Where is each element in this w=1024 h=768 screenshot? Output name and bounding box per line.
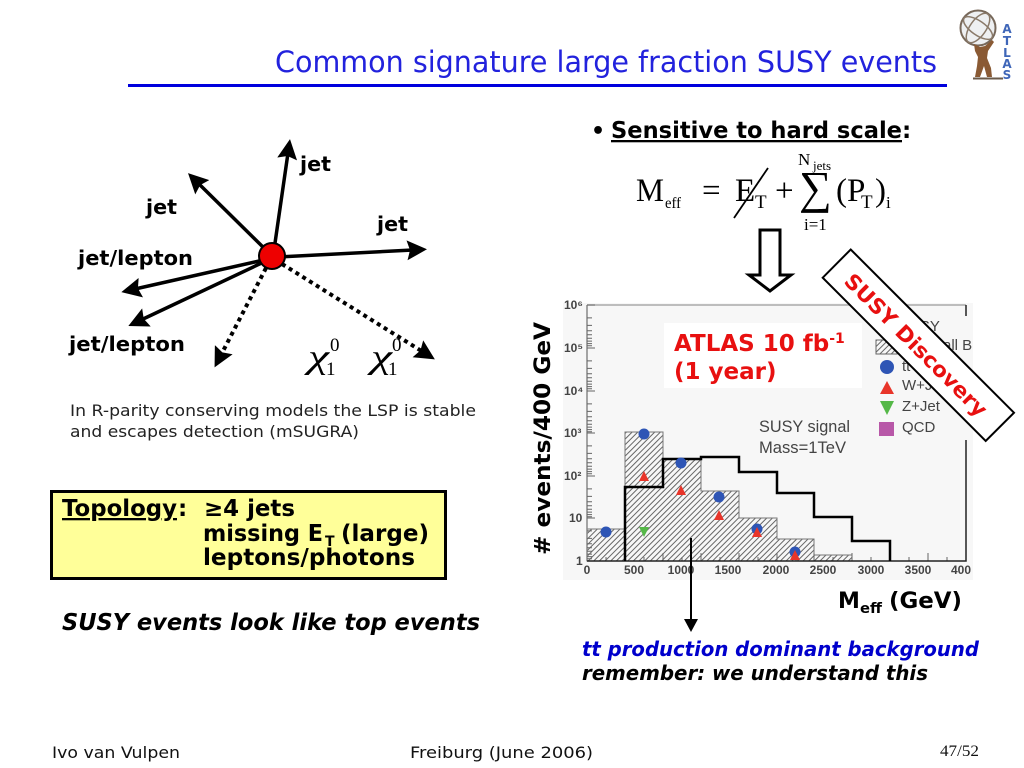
arrow: dotted neutralino down [221,268,266,355]
formula: i=1 [804,215,827,234]
signal label: SUSY signal [759,417,850,436]
arrow: jet right [278,250,413,257]
arrow: background pointer [684,538,698,632]
formula: jets [812,158,831,173]
R-parity text: and escapes detection (mSUGRA) [70,422,359,441]
title underline [128,84,947,87]
icon: ATLAS logo: T [1003,34,1012,48]
event topology diagram [68,152,423,380]
formula: + [775,173,794,209]
label: neutralino 1: 1 [326,359,336,380]
background annotation: tt production dominant background [582,637,979,661]
topology item: missing ET: missing E [203,521,323,547]
legend: Z+Jet [902,398,941,415]
label: neutralino 2 [367,335,402,380]
SUSY top statement: SUSY events look like top events [62,610,480,636]
y tick labels: 10³ [564,426,581,440]
background annotation [582,637,979,685]
formula: E [735,173,755,209]
label: neutralino 1: χ [304,339,330,376]
arrow: hollow down arrow [749,230,791,291]
topology heading: Topology [62,496,177,522]
icon: ATLAS logo: L [1003,46,1011,60]
footer: author: Ivo van Vulpen [52,743,180,762]
data points: W+jet [639,471,800,560]
formula: ∑ [799,162,832,213]
x axis label: (GeV) [889,589,962,614]
legend: QCD [902,419,936,436]
label: jet left: jet [145,195,177,219]
x tick labels: 2000 [763,563,790,577]
formula: T [861,192,873,213]
label: jet/lepton lower: jet/lepton [68,332,185,356]
bullet heading: • [591,119,605,144]
x tick labels: 3500 [905,563,932,577]
x tick labels: 500 [624,563,644,577]
formula [636,150,891,234]
bullet heading: : [902,118,911,144]
y tick labels: 10⁶ [564,298,583,312]
label: neutralino 1 [304,335,340,380]
SUSY signal histogram [625,457,890,561]
topology item: missing ET [203,521,429,550]
legend: SUSY [899,318,940,335]
callout: SUSY discovery [823,250,1014,441]
x tick labels: 3000 [858,563,885,577]
formula: ) [875,173,886,209]
axes [587,305,966,561]
title: Common signature large fraction SUSY events [275,45,937,79]
legend: all B [943,337,972,354]
label: neutralino 2: 1 [388,359,398,380]
arrow: jet/lepton lower [141,260,268,320]
arrow: jet/lepton upper [135,259,268,289]
label: jet right: jet [376,212,408,236]
label: neutralino 2: χ [367,339,393,376]
callout: ATLAS luminosity: -1 [829,331,845,347]
formula: M [636,173,664,209]
y tick labels: 1 [576,554,583,568]
y tick labels: 10 [569,511,583,525]
label: jet/lepton upper: jet/lepton [77,246,193,270]
interaction point [259,243,285,269]
x axis label: eff [860,601,883,617]
y tick labels: 10⁴ [564,384,583,398]
y tick labels: 10⁵ [564,341,583,355]
legend [876,318,972,436]
data point: Z+jet [639,527,649,537]
callout: ATLAS luminosity: ATLAS 10 fb [674,331,829,357]
legend: W+Jet [902,377,946,394]
arrow: dotted neutralino right [282,264,423,352]
formula: N [798,150,810,169]
icon: ATLAS logo: A [1002,57,1012,71]
icon: ATLAS logo [960,9,1012,82]
panel: topology [52,492,446,578]
x axis label: M [838,589,860,614]
background annotation: remember: we understand this [582,661,928,685]
topology item: leptons: leptons/photons [203,545,415,571]
x tick labels: 0 [584,563,591,577]
label: neutralino 1: 0 [330,335,340,356]
arrow: jet up [274,153,288,250]
topology item: missing ET: (large) [341,521,429,547]
x tick labels: 2500 [810,563,837,577]
arrow: jet upper left [198,183,268,252]
data points: ttbar [600,428,800,558]
footer: page number: 47/52 [940,743,979,760]
icon: ATLAS logo: S [1003,68,1011,82]
footer: venue: Freiburg (June 2006) [410,743,593,762]
topology item: missing ET: T [325,534,335,550]
R-parity text [70,401,476,441]
callout: SUSY discovery: SUSY Discovery [839,269,992,422]
bullet heading: Sensitive to hard scale [611,118,902,144]
signal label [759,417,850,457]
callout: ATLAS luminosity: (1 year) [674,359,776,385]
x tick labels: 400 [951,563,971,577]
background histogram [587,432,852,561]
panel: topology: : [178,496,187,522]
x tick labels [584,563,971,577]
formula: = [702,173,721,209]
chart: Meff histogram [563,298,973,580]
R-parity text: In R-parity conserving models the LSP is stable [70,401,476,420]
formula: eff [665,195,682,212]
label: neutralino 2: 0 [392,335,402,356]
y axis label: # events/400 GeV [531,322,556,555]
callout: ATLAS luminosity [664,323,862,388]
legend: tt [902,358,911,375]
x axis label [838,589,962,617]
formula: i [886,193,891,212]
formula: T [755,192,767,213]
x tick labels: 1000 [668,563,695,577]
x tick labels: 1500 [715,563,742,577]
y tick labels: 10² [564,469,581,483]
topology item: jets: ≥4 jets [204,496,295,522]
label: jet top: jet [299,152,331,176]
signal label: Mass=1TeV [759,438,847,457]
icon: ATLAS logo: A [1002,22,1012,36]
y tick labels [564,298,583,568]
formula: (P [836,173,865,209]
